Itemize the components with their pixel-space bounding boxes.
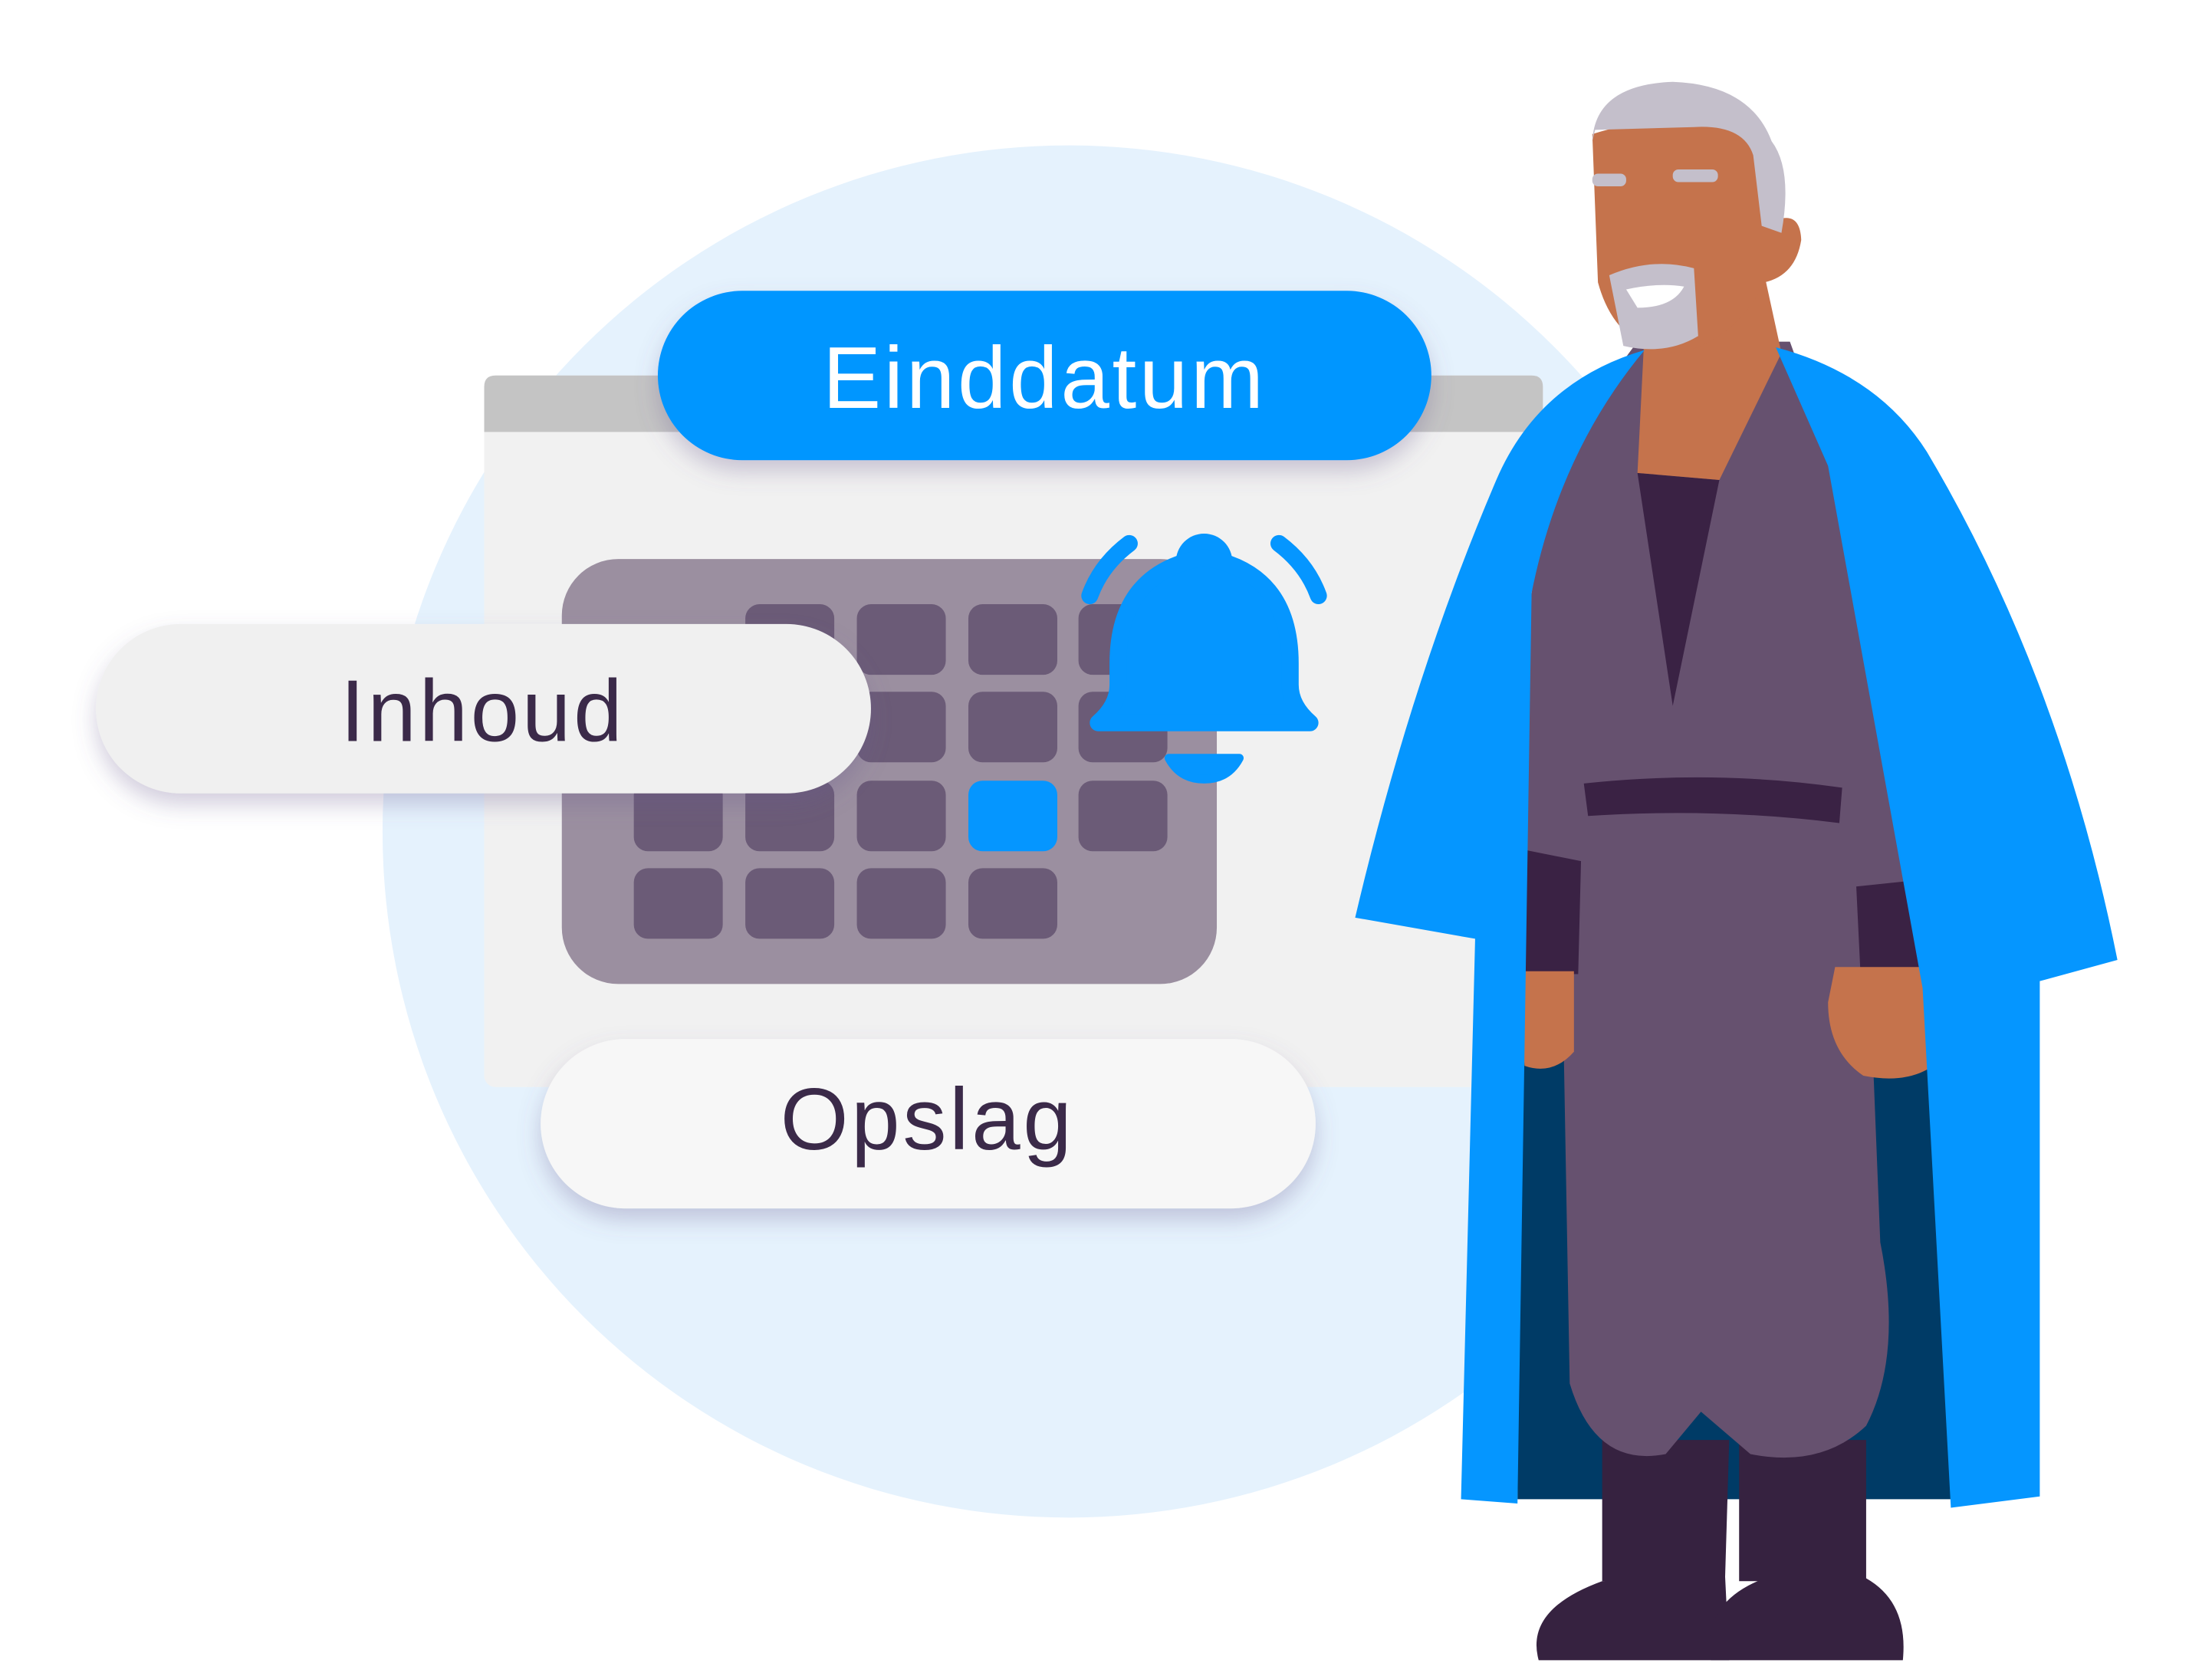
app window <box>484 376 1543 1087</box>
boots <box>1537 1440 1904 1660</box>
pill: Opslag <box>541 1039 1316 1208</box>
hands <box>1517 971 1574 1069</box>
robe <box>1510 342 1937 1458</box>
background circle <box>383 146 1754 1517</box>
pill: Inhoud <box>96 624 871 794</box>
pill: Einddatum <box>658 291 1431 460</box>
pill: Opslag: Opslag <box>781 1071 1074 1168</box>
head <box>1592 120 1801 353</box>
cuffs <box>1510 847 1581 974</box>
highlighted date <box>968 781 1057 851</box>
neck <box>1638 275 1781 480</box>
hair <box>1592 82 1786 233</box>
cape right <box>1776 347 2118 1507</box>
calendar panel <box>562 559 1217 984</box>
beard <box>1609 264 1698 349</box>
pill: Inhoud: Inhoud <box>340 663 625 761</box>
icon: bell <box>1090 534 1319 779</box>
person illustration <box>1355 82 2118 1660</box>
pill: Einddatum: Einddatum <box>823 330 1267 427</box>
cape left <box>1355 350 1645 1504</box>
eyebrows <box>1592 173 1626 186</box>
belt <box>1584 777 1842 823</box>
cape lining <box>1517 833 1951 1499</box>
shirt <box>1638 473 1719 706</box>
